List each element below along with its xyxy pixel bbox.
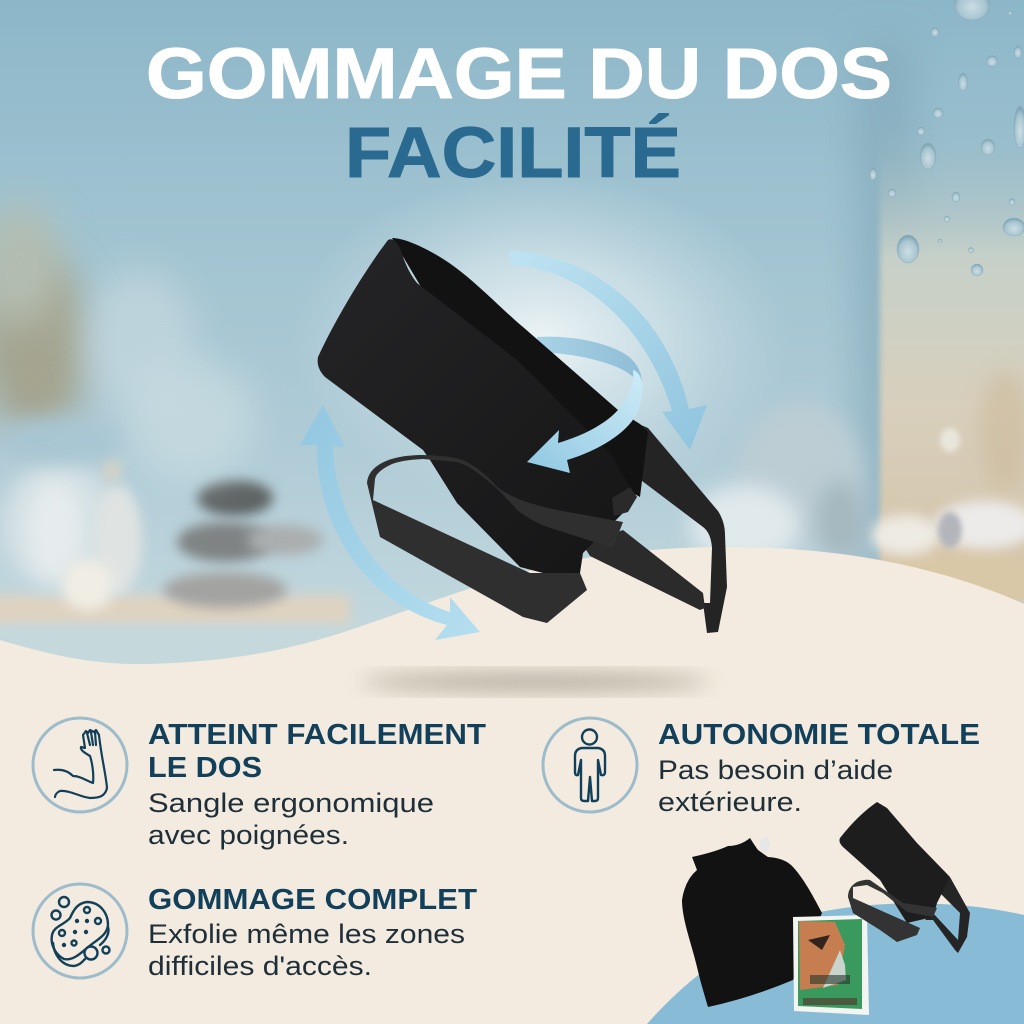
title: GOMMAGE DU DOS [146,35,892,114]
cream wave panel [0,547,1024,1024]
title: FACILITÉ [345,114,681,193]
belt back fold [392,238,648,497]
feature text: gommage complet [148,884,477,981]
feature icon: arm [33,718,127,812]
arrow: top right clockwise [510,251,707,450]
feature text: gommage complet: GOMMAGE COMPLET [148,884,477,916]
arrow: central swirl back ribbon [537,337,642,384]
title [146,35,892,193]
water droplets [870,0,1024,276]
product set: small soap card [793,915,869,1015]
blue corner shape [647,903,1024,1024]
belt front panel [318,239,637,573]
feature text: gommage complet: difficiles d'accès. [148,951,372,981]
product set: small back strap [839,802,970,953]
right strap [617,418,727,633]
arrow: left double-headed [300,405,480,640]
background: blurred spa photo [0,0,1024,680]
product: back scrub strap [318,238,727,633]
feature text: autonomie totale: Pas besoin d’aide [658,755,893,785]
product set: black mitt [682,837,822,1007]
buckle end [612,487,637,516]
feature text: gommage complet: Exfolie même les zones [148,919,465,949]
hook [760,837,770,853]
feature icon: person [543,718,637,812]
feature text: atteint facilement le dos: LE DOS [148,752,262,784]
feature text: autonomie totale: extérieure. [658,787,802,817]
feature text: atteint facilement le dos: avec poignées. [148,820,349,850]
arrow: central swirl front [527,370,643,473]
feature text: autonomie totale: AUTONOMIE TOTALE [658,719,980,751]
feature text: autonomie totale [658,719,980,817]
loop band lower and upper, one strap [367,455,623,623]
lower right strap band [583,530,705,610]
feature icon: sponge [33,884,127,978]
feature text: atteint facilement le dos: Sangle ergonomique [148,788,434,818]
feature text: atteint facilement le dos [148,719,486,850]
feature text: atteint facilement le dos: ATTEINT FACILEMENT [148,719,486,751]
product shadow [360,674,710,690]
